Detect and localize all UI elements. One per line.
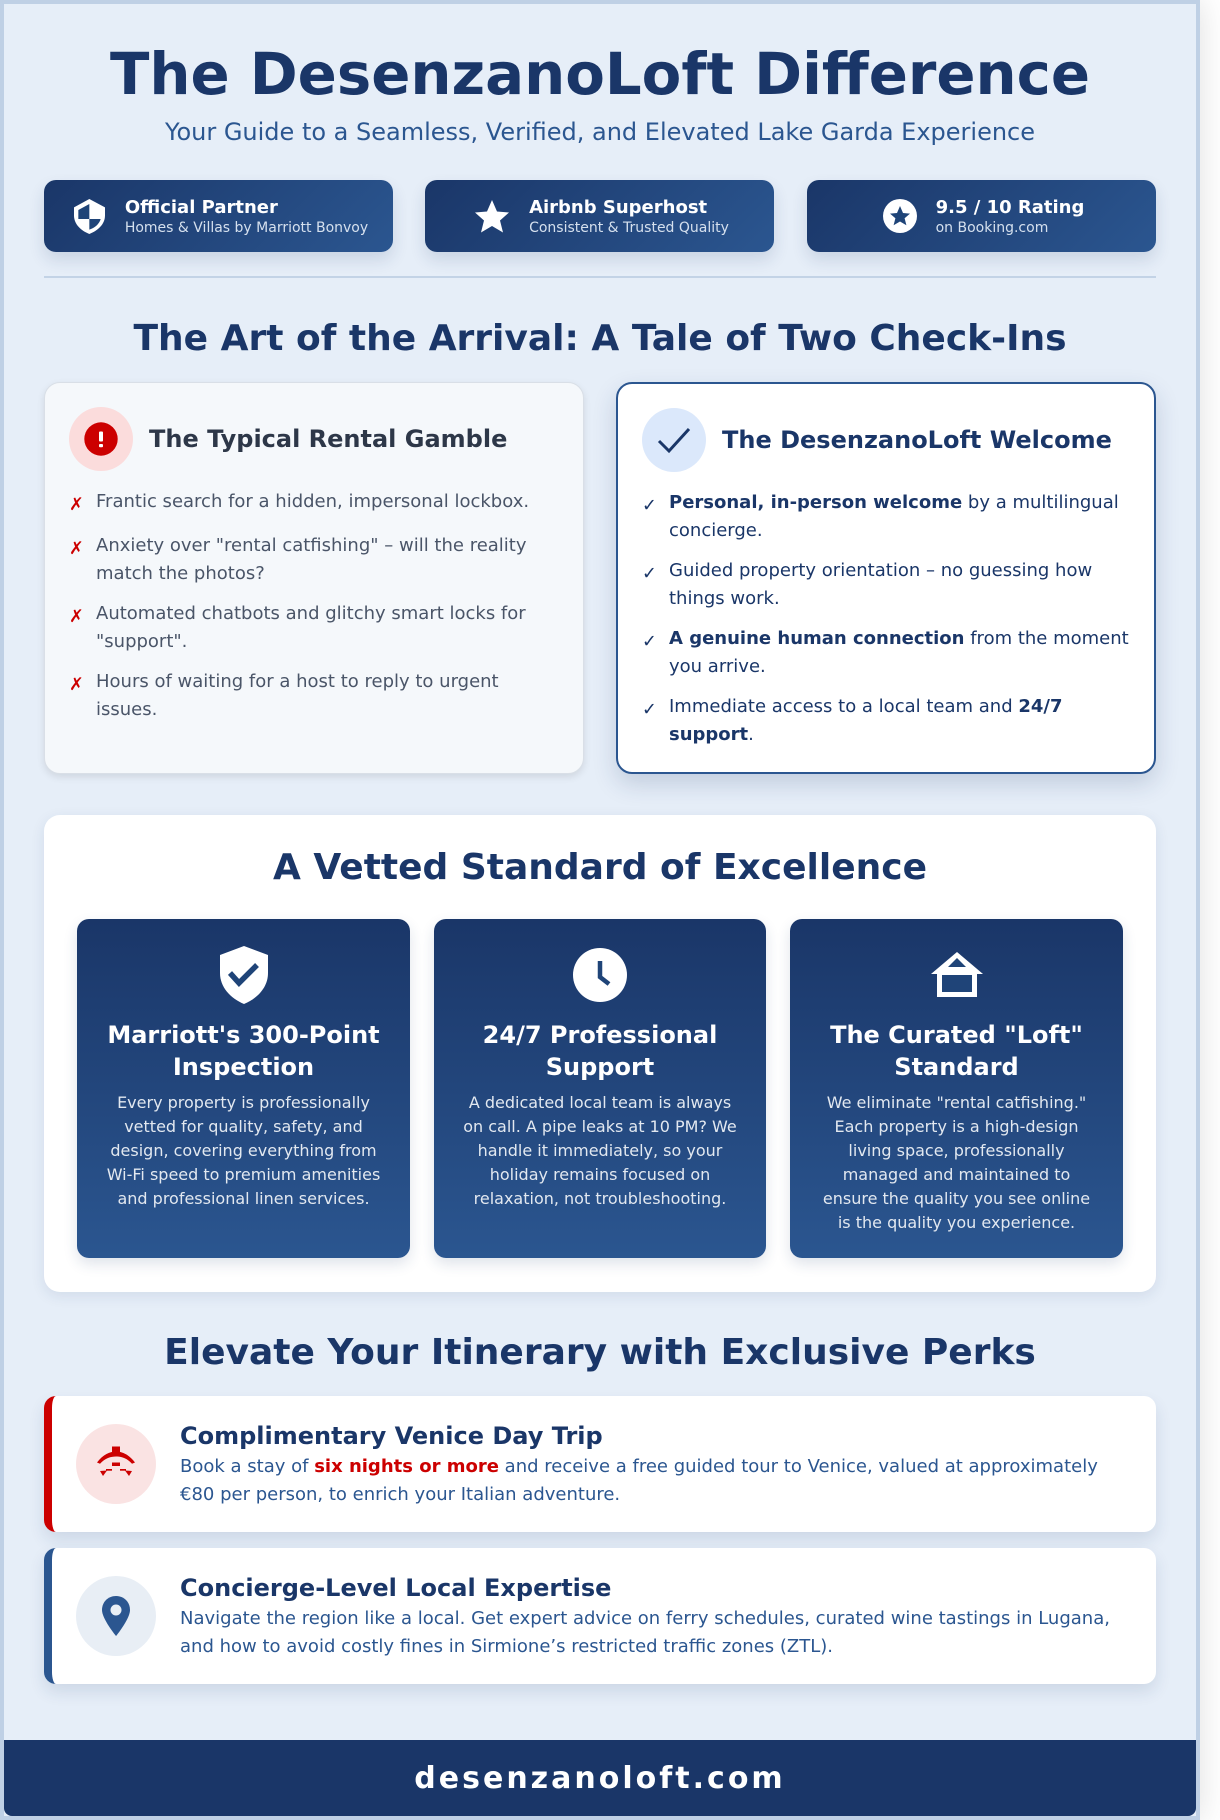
icon: star in circle — [883, 199, 917, 233]
panel: vetted standard — [44, 815, 1156, 1292]
list: ✓ — [642, 564, 657, 584]
list: A genuine human connection from the moment you arrive. — [669, 628, 1129, 677]
perk: local expertise — [44, 1548, 1156, 1684]
text: We eliminate "rental catfishing." Each property is a high-design living space, professionally managed and maintained to ensure the quality you see online is the quality you experience. — [823, 1093, 1090, 1232]
heading: The Typical Rental Gamble — [149, 425, 507, 453]
badge: official partner — [44, 180, 393, 252]
heading: Marriott's 300-Point Inspection — [107, 1021, 380, 1081]
badge: superhost — [425, 180, 774, 252]
card: marriott inspection — [77, 919, 410, 1258]
text: Every property is professionally vetted for quality, safety, and design, covering everything from Wi-Fi speed to premium amenities and professional linen services. — [107, 1093, 380, 1208]
heading: arrival: The Art of the Arrival: A Tale of Two Check-Ins — [133, 318, 1067, 359]
list: Hours of waiting for a host to reply to urgent issues. — [96, 671, 499, 720]
list: ✗ — [69, 607, 84, 627]
title: The DesenzanoLoft Difference — [110, 40, 1090, 108]
perk: venice day trip — [44, 1396, 1156, 1532]
list: Personal, in-person welcome by a multilingual concierge. — [669, 492, 1119, 541]
heading: perks: Elevate Your Itinerary with Exclusive Perks — [164, 1332, 1036, 1373]
subtitle: Your Guide to a Seamless, Verified, and Elevated Lake Garda Experience — [165, 118, 1035, 146]
icon: shield — [74, 199, 105, 234]
badge: rating — [807, 180, 1156, 252]
text: Navigate the region like a local. Get expert advice on ferry schedules, curated wine tastings in Lugana, and how to avoid costly fines in Sirmione’s restricted traffic zones (ZTL). — [180, 1608, 1110, 1657]
list: Automated chatbots and glitchy smart locks for "support". — [96, 603, 526, 652]
heading: Complimentary Venice Day Trip — [180, 1422, 603, 1450]
icon: shield check — [220, 946, 268, 1004]
heading: The DesenzanoLoft Welcome — [722, 426, 1112, 454]
footer — [4, 1740, 1196, 1816]
badge: superhost: Airbnb Superhost — [529, 197, 707, 218]
heading: The Curated "Loft" Standard — [830, 1021, 1083, 1081]
panel: typical rental gamble — [44, 382, 584, 774]
list: ✗ — [69, 675, 84, 695]
panel: desenzanoloft welcome — [616, 382, 1156, 774]
badge: rating: on Booking.com — [936, 220, 1048, 236]
heading: 24/7 Professional Support — [483, 1021, 717, 1081]
badge: official partner: Official Partner — [125, 197, 278, 218]
list: ✓ — [642, 700, 657, 720]
icon: venice — [76, 1424, 156, 1504]
icon: house — [931, 952, 983, 997]
list: Guided property orientation – no guessing how things work. — [669, 560, 1092, 609]
list — [642, 492, 1129, 745]
list: ✓ — [642, 632, 657, 652]
divider — [44, 276, 1156, 278]
icon: clock — [573, 948, 627, 1002]
list: Frantic search for a hidden, impersonal lockbox. — [96, 491, 529, 512]
text: Book a stay of six nights or more and receive a free guided tour to Venice, valued at approximately €80 per person, to enrich your Italian adventure. — [180, 1456, 1098, 1505]
badge: superhost: Consistent & Trusted Quality — [529, 220, 729, 236]
list: ✗ — [69, 495, 84, 515]
card: support — [434, 919, 766, 1258]
heading: Concierge-Level Local Expertise — [180, 1574, 611, 1602]
list: Anxiety over "rental catfishing" – will the reality match the photos? — [96, 535, 527, 584]
card: loft standard — [790, 919, 1123, 1258]
heading: A Vetted Standard of Excellence — [273, 847, 927, 888]
list: ✓ — [642, 496, 657, 516]
badge: rating: 9.5 / 10 Rating — [936, 197, 1084, 218]
icon: star — [475, 200, 509, 232]
badge: official partner: Homes & Villas by Marriott Bonvoy — [125, 220, 368, 236]
icon: map pin — [76, 1576, 156, 1656]
list: ✗ — [69, 539, 84, 559]
text: A dedicated local team is always on call. A pipe leaks at 10 PM? We handle it immediately, so your holiday remains focused on relaxation, not troubleshooting. — [463, 1093, 737, 1208]
footer: desenzanoloft.com — [414, 1761, 786, 1796]
list: Immediate access to a local team and 24/7 support. — [669, 696, 1063, 745]
icon: alert — [69, 407, 133, 471]
icon: check — [642, 408, 706, 472]
list — [69, 491, 529, 720]
